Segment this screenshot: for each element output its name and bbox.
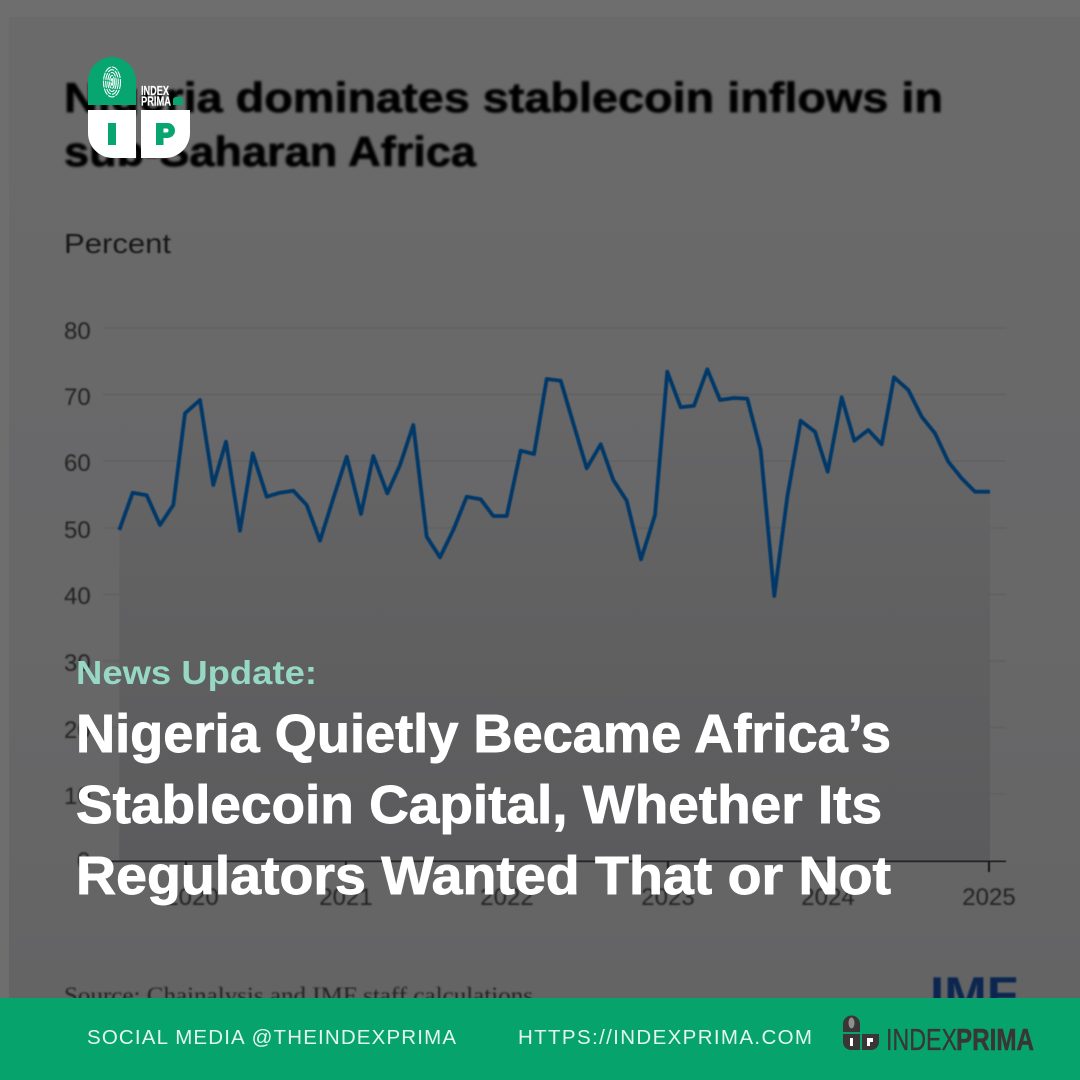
x axis labels: 2024 xyxy=(801,884,855,911)
y axis labels: 70 xyxy=(64,384,91,411)
logo block I xyxy=(88,110,136,158)
y axis labels: 30 xyxy=(64,650,91,677)
footer logo xyxy=(843,1016,1034,1057)
x axis labels: 2021 xyxy=(319,884,373,911)
headline: Stablecoin Capital, Whether Its xyxy=(76,775,882,835)
x axis labels: 2020 xyxy=(165,884,219,911)
footer logo icon xyxy=(843,1016,879,1050)
x axis labels: 2023 xyxy=(641,884,695,911)
area under line xyxy=(119,369,990,861)
y axis labels: 60 xyxy=(64,450,91,477)
source note: Source: Chainalysis and IMF staff calculations xyxy=(64,983,533,1008)
footer bar xyxy=(0,998,1080,1080)
y axis labels: 0 xyxy=(77,848,90,875)
chart title xyxy=(64,74,943,175)
footer wordmark: INDEX xyxy=(886,1022,957,1057)
grid lines xyxy=(103,328,1006,794)
data line xyxy=(119,369,990,596)
y axis labels: 80 xyxy=(64,318,91,345)
x axis xyxy=(103,861,1006,872)
headline xyxy=(76,704,891,906)
news update label: News Update: xyxy=(76,654,317,691)
logo wordmark: INDEX xyxy=(141,84,169,98)
y axis labels: 10 xyxy=(64,783,91,810)
line chart xyxy=(64,318,1016,911)
headline: Regulators Wanted That or Not xyxy=(76,846,891,906)
logo wordmark: PRIMA xyxy=(141,94,171,108)
footer wordmark: PRIMA xyxy=(956,1022,1034,1057)
y axis labels: 50 xyxy=(64,517,91,544)
x axis labels xyxy=(165,884,1016,911)
logo block P xyxy=(141,110,190,158)
unit label: Percent xyxy=(64,228,171,259)
brand logo xyxy=(88,57,190,158)
chart title: sub-Saharan Africa xyxy=(64,128,477,175)
y axis labels: 40 xyxy=(64,583,91,610)
website url: HTTPS://INDEXPRIMA.COM xyxy=(518,1026,812,1049)
logo green top with fingerprint xyxy=(88,57,136,105)
y axis labels xyxy=(64,318,91,875)
footer wordmark xyxy=(886,1022,1034,1057)
headline: Nigeria Quietly Became Africa’s xyxy=(76,704,891,764)
social media handle: SOCIAL MEDIA @THEINDEXPRIMA xyxy=(87,1026,456,1049)
logo green dot xyxy=(173,97,183,105)
icon: fingerprint xyxy=(104,67,120,97)
IMF logo: IMF xyxy=(930,967,1018,1020)
y axis labels: 20 xyxy=(64,717,91,744)
logo wordmark xyxy=(141,84,171,108)
x axis labels: 2025 xyxy=(962,884,1016,911)
chart title: Nigeria dominates stablecoin inflows in xyxy=(64,74,943,121)
x axis labels: 2022 xyxy=(480,884,534,911)
